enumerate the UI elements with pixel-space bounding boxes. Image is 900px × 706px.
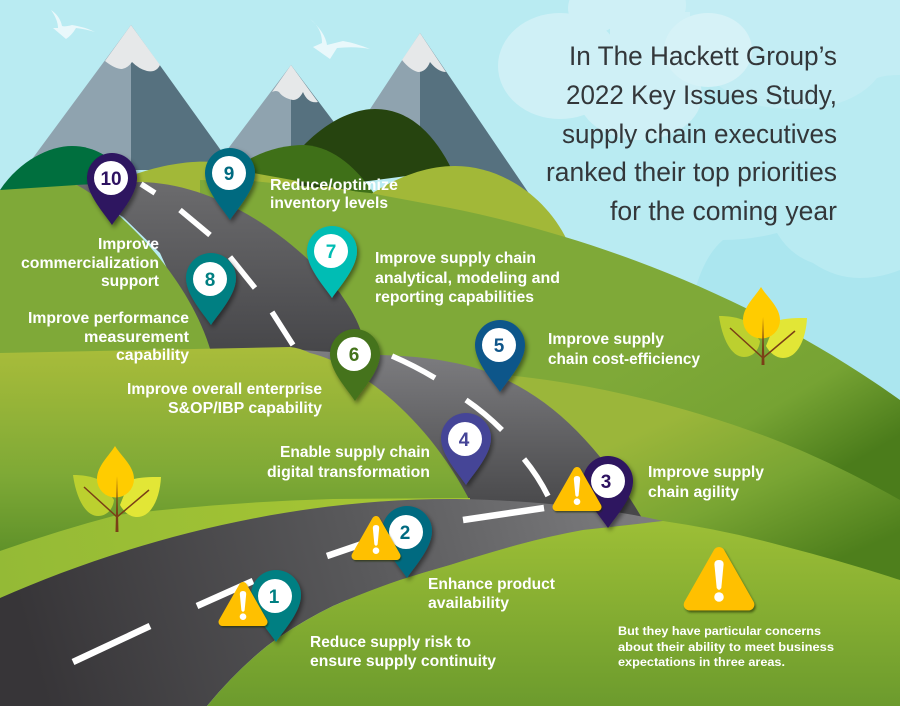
label 9	[270, 177, 398, 212]
concerns callout: about their ability to meet business	[618, 640, 834, 654]
pin 5	[475, 320, 525, 392]
label 1: ensure supply continuity	[310, 653, 496, 670]
label 8: measurement	[84, 329, 189, 346]
clouds	[498, 0, 752, 140]
concerns callout: But they have particular concerns	[618, 624, 821, 638]
label 5: Improve supply	[548, 331, 664, 348]
big right hill	[200, 180, 900, 600]
label 10: support	[101, 273, 159, 290]
label 1	[310, 634, 496, 670]
pin 8: 8	[205, 270, 215, 291]
title text: In The Hackett Group’s	[569, 41, 837, 71]
label 7: Improve supply chain	[375, 250, 536, 267]
label 10: commercialization	[21, 255, 159, 272]
middle hill	[0, 347, 472, 600]
left upper hill	[0, 185, 211, 360]
label 8	[28, 310, 189, 364]
large warning icon	[689, 553, 749, 605]
pin 2: 2	[400, 523, 410, 544]
pin 3	[583, 456, 633, 528]
road: lower segment	[0, 499, 663, 706]
label 9: Reduce/optimize	[270, 177, 398, 194]
pin 8	[186, 253, 236, 325]
pin 1: 1	[269, 587, 280, 608]
light green band	[0, 498, 470, 600]
label 6: S&OP/IBP capability	[168, 400, 322, 417]
label 3: chain agility	[648, 484, 739, 501]
second hill on the right	[500, 375, 900, 590]
label 4: Enable supply chain	[280, 444, 430, 461]
pin 10: 10	[100, 169, 122, 190]
warning icon on pin 3	[556, 471, 598, 507]
title text	[546, 41, 837, 226]
label 2: availability	[428, 595, 509, 612]
concerns callout: expectations in three areas.	[618, 655, 785, 669]
road: middle segment	[300, 350, 642, 520]
title text: 2022 Key Issues Study,	[566, 80, 837, 110]
warning icon on pin 1	[222, 586, 264, 622]
label 5	[548, 331, 700, 368]
title text: ranked their top priorities	[546, 157, 837, 187]
pin 9	[205, 148, 255, 220]
concerns callout	[618, 624, 834, 669]
label 8: capability	[116, 347, 189, 364]
label 10: Improve	[98, 236, 159, 253]
pin 6: 6	[349, 345, 359, 366]
pin 4: 4	[459, 430, 470, 451]
road: upper segment	[75, 182, 362, 352]
mountains	[24, 25, 530, 195]
pin 5: 5	[494, 336, 505, 357]
label 6	[127, 381, 322, 417]
label 2	[428, 576, 555, 612]
title text: for the coming year	[610, 196, 837, 226]
label 3: Improve supply	[648, 464, 764, 481]
bottom hill	[207, 521, 900, 706]
label 6: Improve overall enterprise	[127, 381, 322, 398]
pin 7	[307, 226, 357, 298]
label 4: digital transformation	[267, 464, 430, 481]
warning icon on pin 2	[356, 520, 396, 556]
pin 2	[382, 506, 432, 578]
label 7: reporting capabilities	[375, 289, 534, 306]
label 8: Improve performance	[28, 310, 189, 327]
icon: plant right	[719, 287, 807, 365]
label 4	[267, 444, 430, 481]
label 9: inventory levels	[270, 195, 388, 212]
road lane dashes	[73, 184, 548, 662]
title text: supply chain executives	[562, 119, 837, 149]
label 3	[648, 464, 764, 501]
label 7	[375, 250, 560, 306]
pin 7: 7	[326, 242, 336, 263]
label 1: Reduce supply risk to	[310, 634, 471, 651]
label 7: analytical, modeling and	[375, 270, 560, 287]
pin 1	[251, 570, 301, 642]
pin 6	[330, 329, 380, 401]
pin 10	[87, 153, 137, 225]
icon: plant left	[73, 446, 161, 532]
pin 4	[441, 413, 491, 485]
birds	[51, 10, 370, 59]
pin 9: 9	[224, 164, 234, 185]
label 10	[21, 236, 159, 290]
label 2: Enhance product	[428, 576, 555, 593]
pin 3: 3	[601, 472, 611, 493]
back hills	[0, 109, 567, 240]
label 5: chain cost-efficiency	[548, 351, 700, 368]
